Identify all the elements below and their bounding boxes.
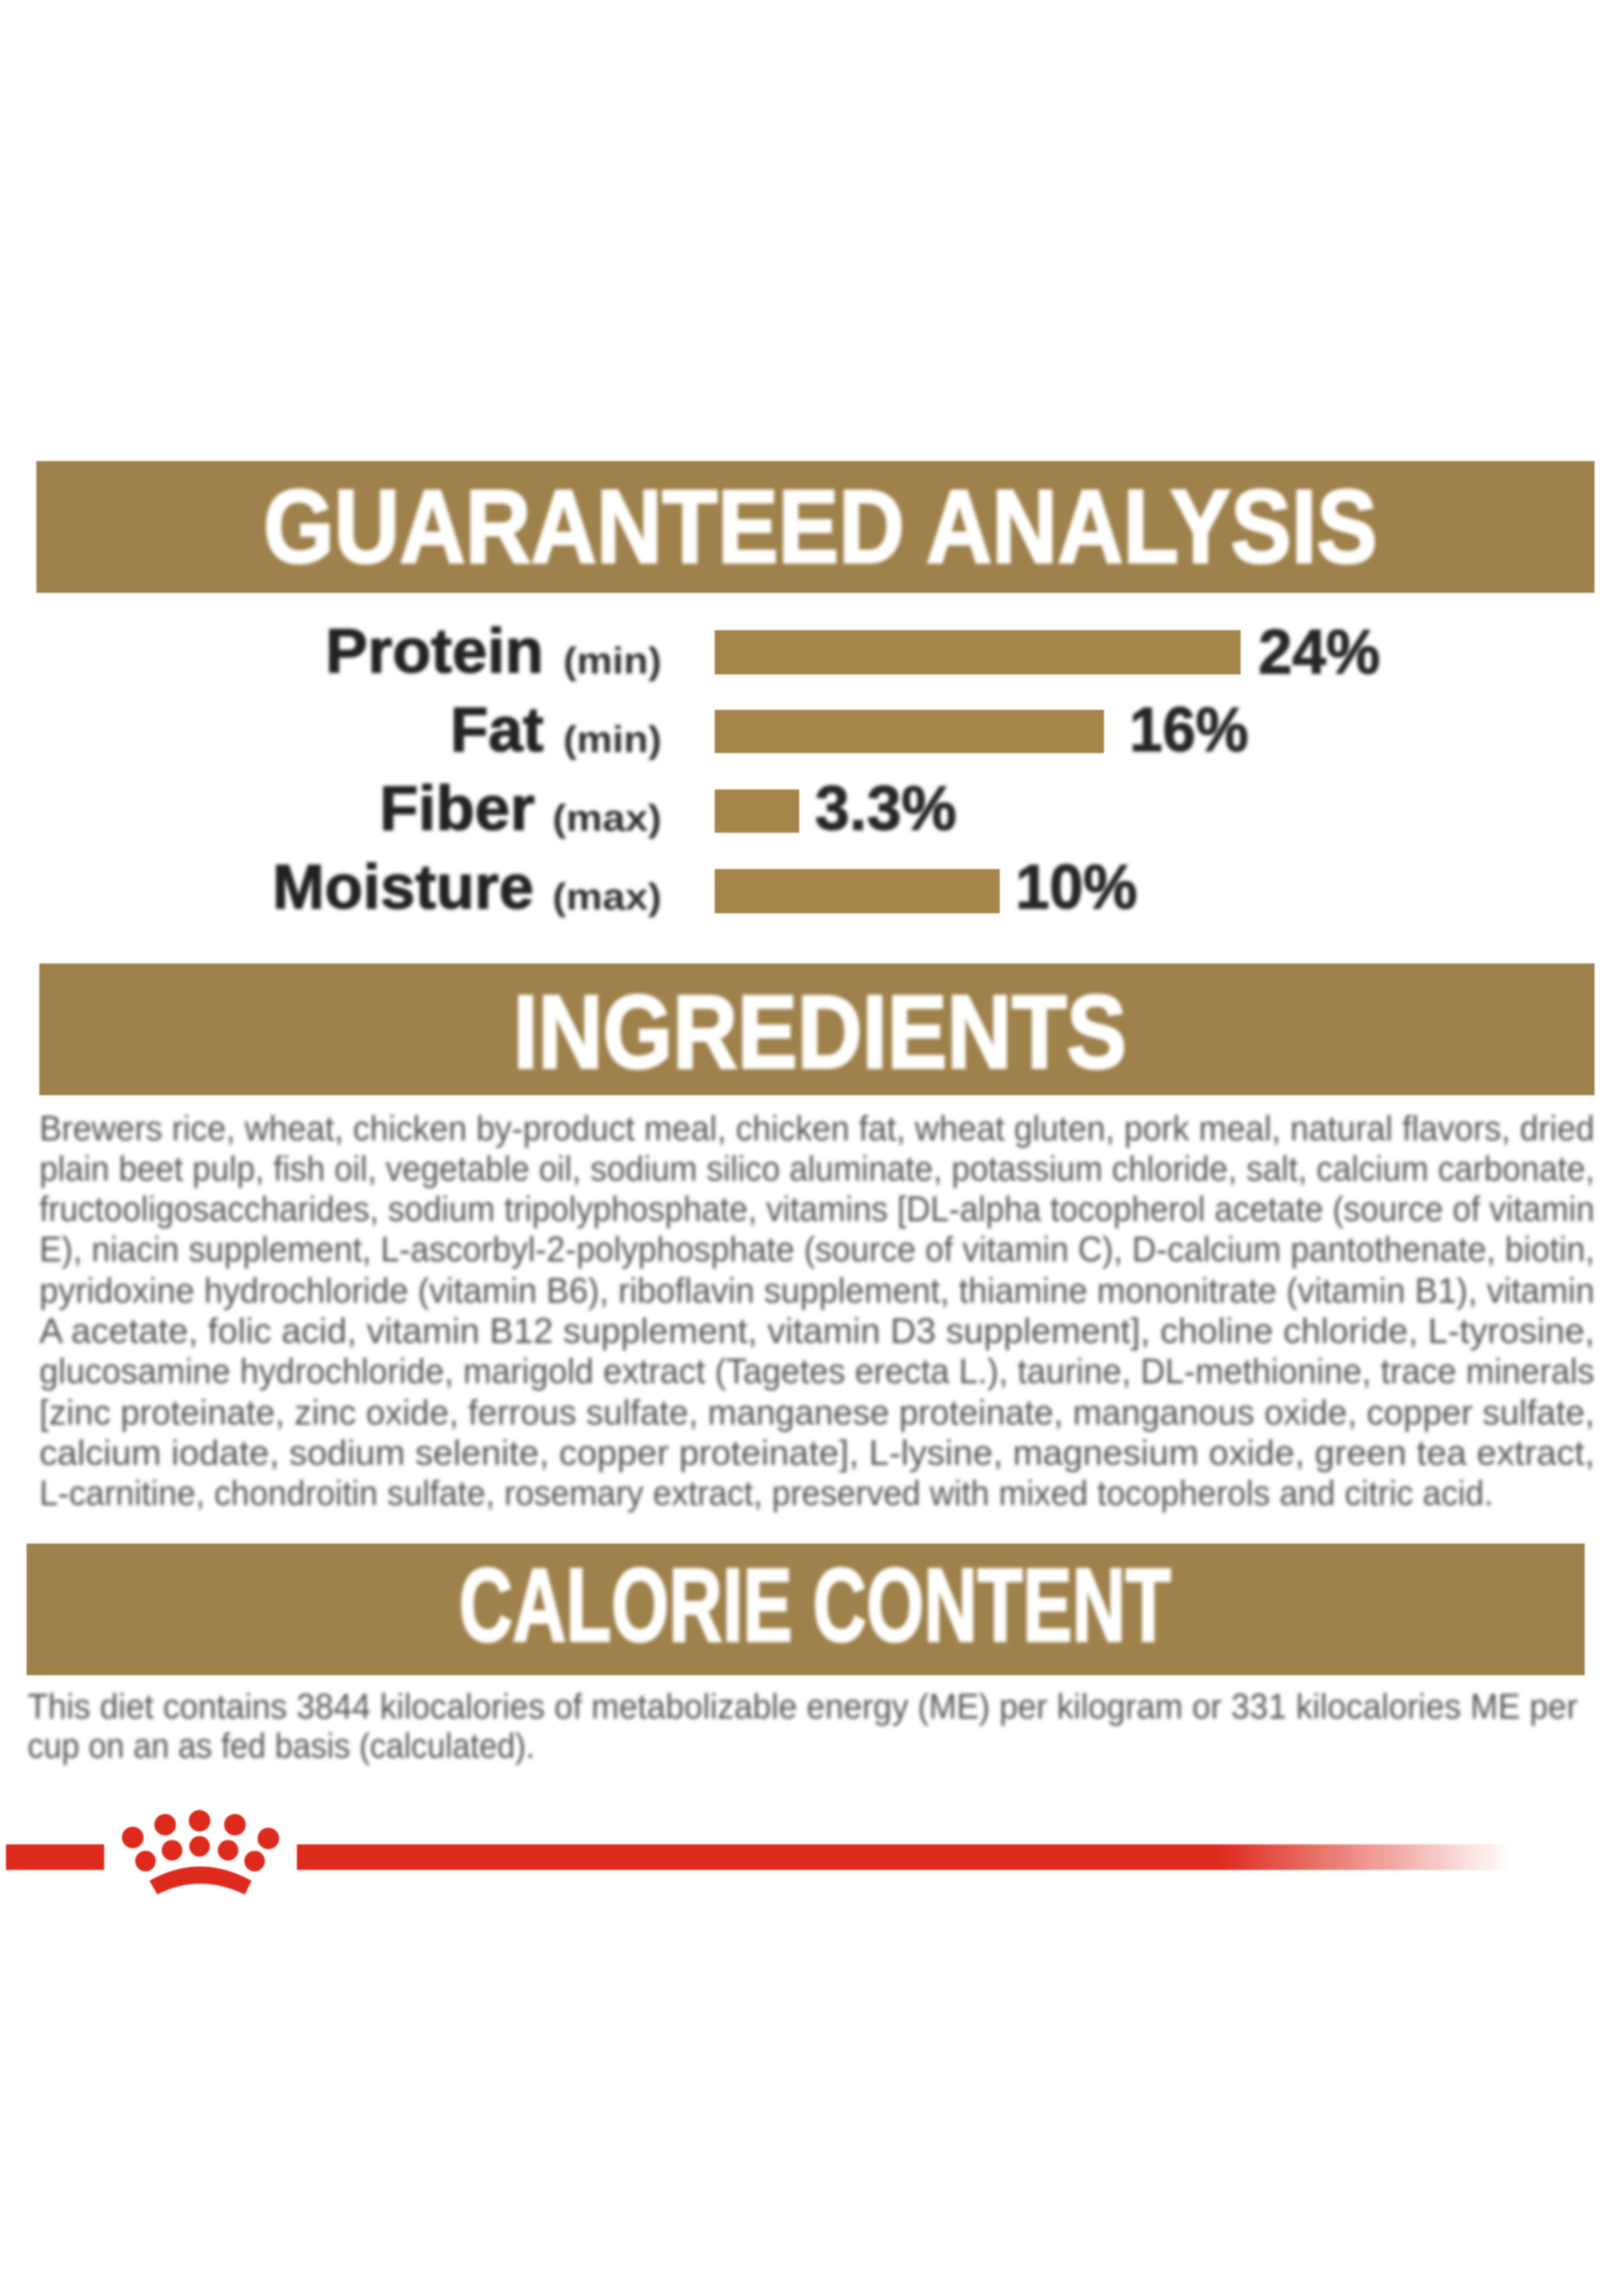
- panel: ingredients: [39, 963, 1595, 1513]
- row: fat: [450, 694, 1248, 765]
- text block: ingredients list: glucosamine hydrochloride, marigold extract (Tagetes erecta L.), taurine, DL-methionine, trace minerals: [39, 1351, 1595, 1391]
- text block: ingredients list: pyridoxine hydrochloride (vitamin B6), riboflavin supplement, thiamine mononitrate (vitamin B1), vitamin: [39, 1270, 1595, 1311]
- banner: calorie content: [27, 1544, 1585, 1675]
- row: moisture: Moisture: [272, 851, 534, 922]
- row: fat: Fat: [450, 694, 544, 765]
- row: protein: (min): [563, 641, 662, 682]
- text block: ingredients list: calcium iodate, sodium selenite, copper proteinate], L-lysine, magnesium oxide, green tea extract,: [39, 1432, 1595, 1473]
- row: fiber: 3.3%: [815, 773, 957, 844]
- row: fiber: Fiber: [379, 773, 535, 844]
- text block: calorie statement: [28, 1686, 1578, 1766]
- row: fat: (min): [563, 720, 662, 761]
- footer: red brand line with crown: [6, 1810, 1510, 1895]
- row: protein: 24%: [1258, 616, 1380, 687]
- row: moisture: [272, 851, 1137, 922]
- banner: ingredients: [39, 963, 1595, 1095]
- text block: calorie statement: This diet contains 3844 kilocalories of metabolizable energy (ME) per kilogram or 331 kilocalories ME per: [28, 1686, 1578, 1726]
- red line: left segment: [6, 1844, 104, 1870]
- text block: ingredients list: L-carnitine, chondroitin sulfate, rosemary extract, preserved with mixed tocopherols and citric acid.: [39, 1473, 1493, 1513]
- banner: guaranteed analysis: [36, 461, 1595, 593]
- heading: guaranteed analysis: GUARANTEED ANALYSIS: [263, 469, 1377, 585]
- row: protein: [325, 615, 1380, 687]
- panel: calorie content: [27, 1544, 1585, 1766]
- panel: guaranteed analysis: [36, 461, 1595, 922]
- row: moisture: (max): [552, 877, 662, 918]
- icon: royal crown logo: [122, 1810, 279, 1895]
- red line: right segment fading out: [297, 1844, 1510, 1870]
- row: fiber: [379, 773, 957, 844]
- bar chart: nutrient percentages: [272, 615, 1380, 922]
- text block: ingredients list: [zinc proteinate, zinc oxide, ferrous sulfate, manganese proteinate, manganous oxide, copper sulfate,: [39, 1392, 1595, 1432]
- text block: ingredients list: A acetate, folic acid, vitamin B12 supplement, vitamin D3 supplement], choline chloride, L-tyrosine,: [39, 1311, 1595, 1351]
- row: protein: Protein: [325, 615, 544, 686]
- row: moisture: 10%: [1015, 851, 1137, 922]
- text block: calorie statement: cup on an as fed basis (calculated).: [28, 1725, 535, 1766]
- heading: calorie content: CALORIE CONTENT: [459, 1547, 1171, 1663]
- row: fiber: (max): [552, 798, 662, 840]
- heading: ingredients: INGREDIENTS: [513, 974, 1127, 1090]
- text block: ingredients list: [39, 1108, 1595, 1513]
- row: fat: 16%: [1130, 694, 1248, 765]
